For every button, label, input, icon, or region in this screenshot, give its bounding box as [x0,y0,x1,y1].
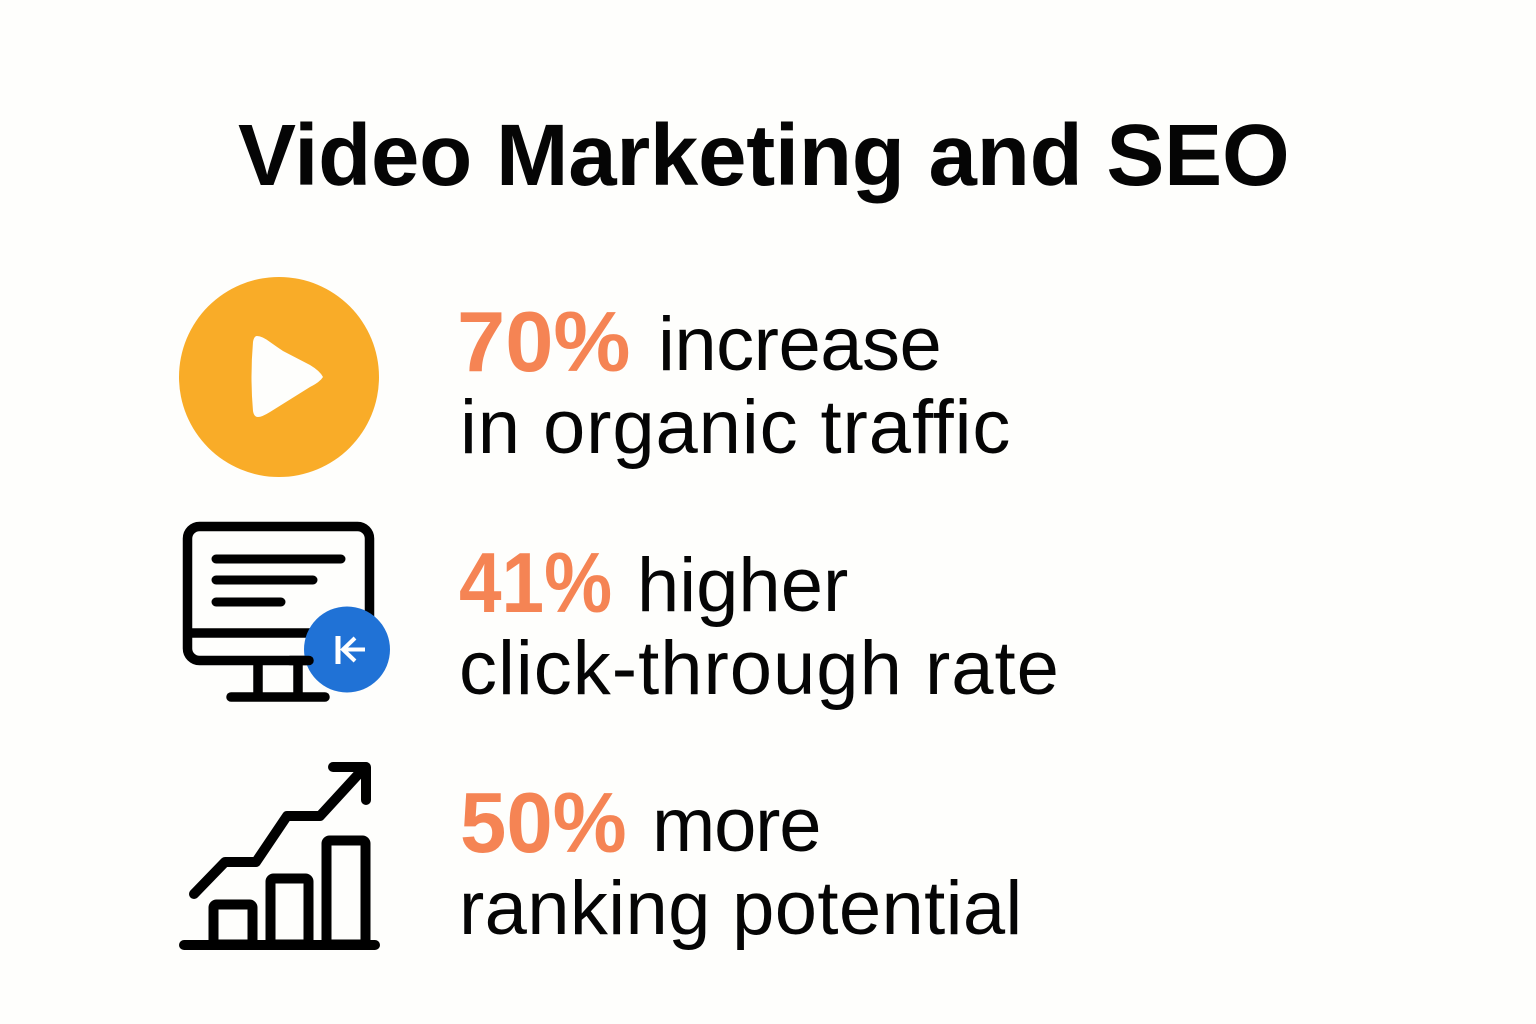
stat: 50% more ranking potential [459,776,1023,951]
stat: 70% increase in organic traffic: increase [658,302,941,387]
icon: monitor with blue badge [182,522,390,702]
stat: 41% higher click-through rate [459,536,1060,711]
stat: 70% increase in organic traffic: 70% [457,295,631,390]
stat: 70% increase in organic traffic: in organic traffic [460,385,1011,470]
stat: 50% more ranking potential: more [652,783,820,868]
icon: play button [179,277,379,477]
stat: 41% higher click-through rate: click-through rate [459,626,1060,711]
stat: 41% higher click-through rate: higher [637,543,848,628]
title: Video Marketing and SEO [238,107,1289,204]
stat: 70% increase in organic traffic [457,295,1011,470]
stat: 50% more ranking potential: ranking potential [459,866,1023,951]
icon: rising bar chart with arrow [179,762,380,950]
stat: 50% more ranking potential: 50% [460,776,627,871]
stat: 41% higher click-through rate: 41% [459,536,612,631]
